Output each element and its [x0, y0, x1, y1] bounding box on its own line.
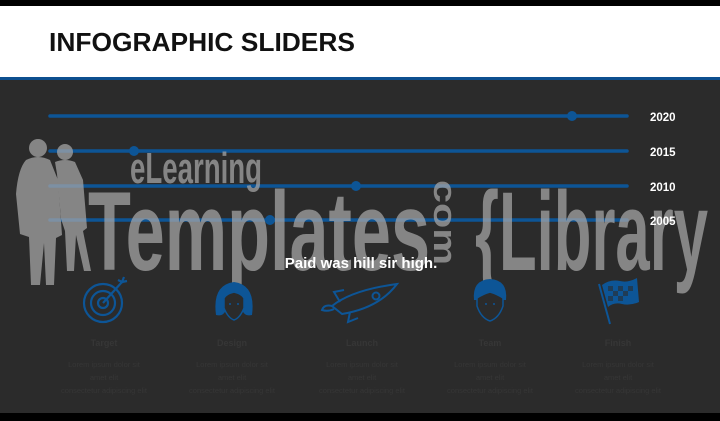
icon: target — [84, 277, 127, 322]
faint item texts: Target — [91, 338, 117, 348]
year labels — [650, 112, 676, 228]
faint item texts: amet elit — [218, 373, 247, 382]
faint item texts: consectetur adipiscing elit — [447, 386, 534, 395]
watermark: eLearning — [130, 144, 262, 193]
faint item texts: Launch — [346, 338, 378, 348]
slider: 2015 — [50, 146, 627, 156]
title: INFOGRAPHIC SLIDERS — [49, 27, 355, 57]
watermark: com — [427, 180, 463, 265]
icon: man — [474, 279, 506, 321]
faint item texts: consectetur adipiscing elit — [61, 386, 148, 395]
faint item texts: Lorem ipsum dolor sit — [454, 360, 527, 369]
icon: rocket — [322, 284, 397, 322]
faint item texts: amet elit — [90, 373, 119, 382]
icon: woman — [215, 282, 253, 320]
faint item texts — [61, 338, 662, 395]
watermark — [16, 139, 708, 294]
header panel — [0, 6, 720, 80]
caption: Paid was hill sir high. — [285, 255, 437, 272]
watermark: Templates — [88, 169, 430, 294]
faint item texts: consectetur adipiscing elit — [575, 386, 662, 395]
faint item texts: consectetur adipiscing elit — [189, 386, 276, 395]
faint item texts: amet elit — [604, 373, 633, 382]
year labels: 2020 — [650, 112, 676, 124]
main dark panel — [0, 80, 720, 413]
faint item texts: Lorem ipsum dolor sit — [196, 360, 269, 369]
slider: 2010 — [50, 181, 627, 191]
faint item texts: Finish — [605, 338, 631, 348]
slider: 2005 — [50, 215, 627, 225]
icon: checkered flag — [599, 278, 639, 324]
faint item texts: consectetur adipiscing elit — [319, 386, 406, 395]
faint item texts: Lorem ipsum dolor sit — [326, 360, 399, 369]
faint item texts: Team — [479, 338, 501, 348]
year labels: 2010 — [650, 182, 676, 194]
faint item texts: amet elit — [476, 373, 505, 382]
faint item texts: Lorem ipsum dolor sit — [68, 360, 141, 369]
year labels: 2015 — [650, 147, 676, 159]
slider: 2020 — [50, 111, 627, 121]
faint item texts: Design — [217, 338, 247, 348]
faint item texts: Lorem ipsum dolor sit — [582, 360, 655, 369]
year labels: 2005 — [650, 216, 676, 228]
faint item texts: amet elit — [348, 373, 377, 382]
